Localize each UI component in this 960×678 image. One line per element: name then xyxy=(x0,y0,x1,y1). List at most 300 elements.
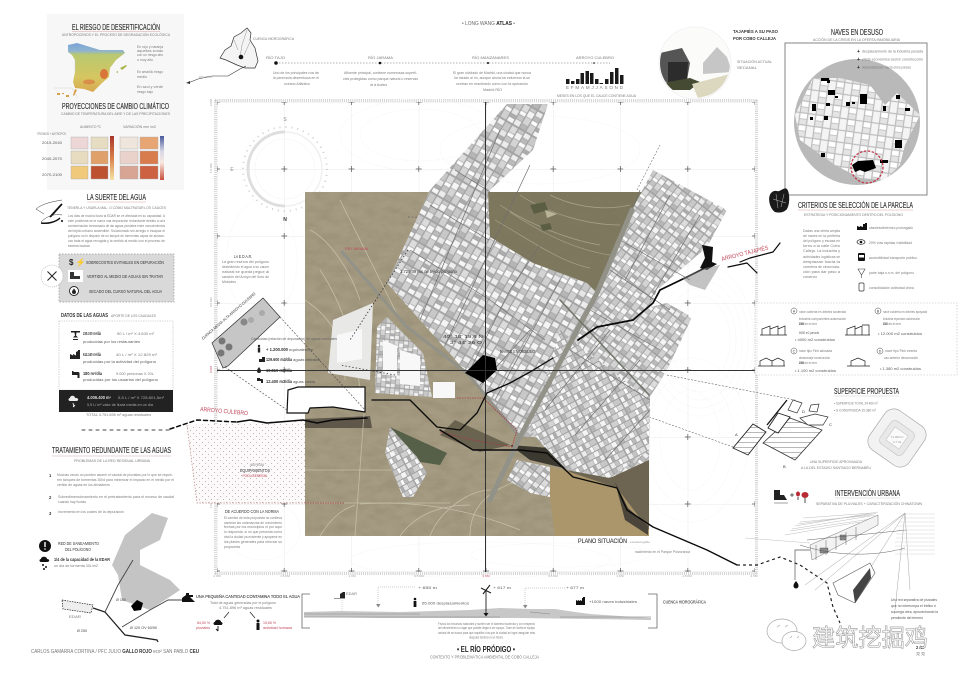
plant capacity data: 129.600 m3/día xyxy=(266,357,293,362)
heading: tratamiento redundante xyxy=(52,446,171,463)
map legend text: o muy alto xyxy=(137,58,153,62)
criteria icons and labels: obsoleto/deterioro prolongado xyxy=(869,226,913,230)
bottom terrain section xyxy=(302,585,706,660)
plant capacity data: aguas entrada xyxy=(293,358,320,362)
icon: cross in dashed circle xyxy=(41,265,63,287)
rio tajo xyxy=(266,56,319,86)
rio manzanares: centran en reactivarlo como con la operación xyxy=(456,82,528,86)
rio tajo: Uno de los principales ríos de xyxy=(273,71,319,75)
text: de acuerdo con la norma: lo respuesta, si no que presenta como xyxy=(224,530,282,534)
criteria icons and labels xyxy=(857,223,917,291)
callout: contamination shares: Total de aguas generadas por el polígono xyxy=(210,601,276,605)
rio tajo: RÍO TAJO xyxy=(266,56,285,60)
plant capacity data: Capacidad (relación de depuración) de aguas residuales xyxy=(251,337,337,341)
compass rose: S xyxy=(283,117,287,123)
aerial photo with city fabric xyxy=(287,104,795,536)
icon: river bends xyxy=(36,200,63,223)
heading: datos de las aguas xyxy=(61,313,156,319)
caption: tajapies: TAJAPIÉS A SU PASO xyxy=(733,29,779,34)
footer credit: CARLOS GAMARRA CORTINA / PFC JULIO GALLO ROJO eco² SAN PABLO CEU xyxy=(31,649,199,655)
heading: la suerte del agua: TENERLA Y USARLA MAL. O CÓMO MALTRATAR LOS CAUCES xyxy=(67,205,166,210)
type C: nave tipo Fink adosada xyxy=(799,349,832,353)
arroyo culebro: ARROYO CULEBRO xyxy=(576,56,614,60)
numbered list: vertido de aguas de los aliviaderos xyxy=(57,483,110,487)
mini map: sewer network: Ø 250 xyxy=(77,629,87,633)
text: criteria paragraph: Calleja. La industria y xyxy=(803,249,840,253)
type A: 6900 m2 parcela xyxy=(799,330,820,335)
text: criteria paragraph: Dadas una oferta amplia xyxy=(803,229,840,233)
callout: contamination shares: 84,50 % xyxy=(197,620,210,625)
climate map grids xyxy=(71,137,158,179)
plant capacity data: 12.400 m3/día xyxy=(266,379,293,384)
main highways xyxy=(342,210,649,500)
type A xyxy=(760,308,846,342)
compass rose: E xyxy=(230,167,234,173)
type B: B xyxy=(877,310,880,314)
page number: 見 見 xyxy=(916,651,925,657)
text: water fate paragraph: tratamiento inaudizado xyxy=(68,244,90,248)
panel: desertification and climate: 2015-2040 xyxy=(42,140,63,145)
text: water fate paragraph: del tejido urbano sostenible. Solucionado sin arreglo e incapaz el xyxy=(68,229,165,233)
row: users: producidas por los usuarios del polígono xyxy=(83,377,159,382)
text: water fate paragraph: nar toda el agua recogida y la vertido al medio con el proceso de xyxy=(68,239,165,243)
page number: 2 /27 xyxy=(916,645,926,650)
label: plano situacion: PLANO SITUACIÓN xyxy=(578,538,627,545)
type B: nave cubierta en dientes apoyada xyxy=(883,310,927,314)
type C xyxy=(758,348,836,373)
row: industrial activity: producidas por la actividad del polígono xyxy=(83,359,157,364)
type A: industria componentes automoción xyxy=(799,317,846,321)
text: de acuerdo con la norma xyxy=(224,509,282,549)
type B: 2010 año de cierre xyxy=(883,322,901,326)
icon: water drop xyxy=(794,581,798,588)
type C: 2008 año de cierre xyxy=(799,361,817,365)
icon: restaurant xyxy=(71,331,80,340)
row: restaurants xyxy=(83,331,155,344)
elevation 677: + 677 m xyxy=(566,585,585,590)
text: section note: natural de se busca para que aquellos ríos que la ciudad se logre asegurar más xyxy=(438,631,535,635)
scale labels: 0 KM xyxy=(482,574,490,578)
numbered list: cuando hay lluvias xyxy=(58,500,86,504)
type B xyxy=(845,308,927,336)
river bank xyxy=(305,416,372,428)
row: industrial activity: 613.160 m³/día xyxy=(83,352,101,357)
text: sewer network: RED DE SANEAMIENTO xyxy=(58,541,100,546)
heading: tratamiento redundante: TRATAMIENTO REDUNDANTE DE LAS AGUAS xyxy=(52,446,171,455)
panel: warehouse types xyxy=(755,303,957,375)
numbered list: Incremento en los costes de la depuración xyxy=(58,510,124,514)
EDAR marker: EDAR xyxy=(346,592,357,596)
west roads xyxy=(305,200,520,536)
labels on aerial photo xyxy=(345,246,536,354)
numbered list: ren tanques de tormentas 30l/d para minimizar el impacto en el medio por el xyxy=(57,478,174,482)
panel: overflow consequences: VERTIDO AL MEDIO DE AGUAS SIN TRATAR xyxy=(87,274,163,279)
chart: months with water xyxy=(557,68,637,98)
scale labels: 0.5 KM xyxy=(414,574,424,578)
text: criteria paragraph: actividades logísticas se xyxy=(803,255,840,259)
icon: Madrid basin map: RÍO TAJO xyxy=(199,75,213,79)
displacements: 65.000 desplazamientos xyxy=(422,600,469,606)
criteria icons and labels: parte baja s.n.m. del polígono xyxy=(869,271,914,275)
type A: nave cubierta en dientes sostenida xyxy=(799,310,846,314)
text: separative network xyxy=(891,598,938,620)
text: capacity: 1/4 de la capacidad de la EDAR xyxy=(54,557,110,562)
panel: naves en desuso: NAVES EN DESUSO xyxy=(831,28,883,37)
text: de acuerdo con la norma: El cambio de esta propuesta no conlleva xyxy=(224,516,282,520)
heading: la suerte del agua xyxy=(67,193,166,210)
scale labels: 1.5 KM xyxy=(209,163,213,173)
panel: overflow consequences xyxy=(41,254,174,302)
type D: • 1.380 m2 construidos xyxy=(880,366,921,371)
text: equipamientos: EQUIPAMIENTOS xyxy=(240,468,270,473)
river: dashed source xyxy=(737,557,840,623)
text: section note: después tendrá en un futuro xyxy=(469,636,503,640)
caption: stadium xyxy=(801,460,871,470)
bullet notes: deslocalización hacia otros países xyxy=(862,66,911,70)
type A: A xyxy=(793,310,796,314)
text: section note: del ofrecimiento un lugar que posible llegar a ser equipo. Traer de vuelta el equipo xyxy=(438,626,535,630)
heading: climate projections: PROYECCIONES DE CAMBIO CLIMÁTICO xyxy=(62,102,169,111)
panel: desertification and climate xyxy=(37,14,184,190)
parcels plan xyxy=(733,400,832,469)
dotted equipment zone xyxy=(187,420,305,503)
text: section note: Frutos los recursos naturales y suelen ser el sistema haciendo y con respecto xyxy=(438,622,535,626)
map legend text: aquellas zonas xyxy=(137,49,163,53)
factories note xyxy=(576,597,637,605)
label: arroyo culebro: ARROYO CULEBRO xyxy=(200,407,248,417)
wastewater plant xyxy=(201,292,365,410)
icon: Madrid basin map xyxy=(186,28,295,84)
row: restaurants: 50 L / m² X 4.600 m² xyxy=(117,332,155,336)
map legend text: con un riesgo alto xyxy=(137,53,163,57)
windmill and elevation 617 xyxy=(481,585,512,616)
caption: tajapies: SITUACIÓN ACTUAL xyxy=(737,59,772,64)
rio tajo: océano Atlántico xyxy=(284,82,310,86)
type B: • 12.000 m2 construidos xyxy=(878,331,922,336)
type C: • 1.100 m2 construidos xyxy=(795,368,836,373)
panel: proposed surface: • S CONSTRUIDA 15.380 m² xyxy=(834,408,877,412)
panel: desertification and climate: 2040-2070 xyxy=(42,156,63,161)
heading: tratamiento redundante: PROBLEMAS DE LA RED RESIDUAL URBANA xyxy=(74,459,150,463)
map of Spain xyxy=(54,43,127,98)
labels on aerial photo: 40° 18' 19,6 N xyxy=(443,334,483,339)
displacements xyxy=(414,598,469,607)
white industrial blocks xyxy=(337,329,455,398)
scale labels: 2 KM xyxy=(213,574,221,578)
map legend text: En azul y verde xyxy=(137,85,163,89)
label: arroyo tajapies: ARROYO TAJAPIÉS xyxy=(721,245,769,263)
windmill and elevation 617: + 617 m xyxy=(493,585,512,590)
page number xyxy=(916,645,926,657)
callout: rainfall: 5,5 L/ m² valor de lluvia media en un día xyxy=(87,403,153,407)
scale labels: 0.5 KM xyxy=(209,297,213,307)
text: criteria paragraph: comercio xyxy=(803,275,817,279)
elevation 655 xyxy=(376,585,438,608)
stadium comparison xyxy=(864,405,930,471)
watermark: 建筑挖掘鸡 xyxy=(812,618,928,653)
panel: urban intervention: SEPARATIVA DE PLUVIALES + CARACTERIZACIÓN CHINATOWN xyxy=(816,501,922,506)
EDAR marker xyxy=(334,592,357,612)
blank plot outline xyxy=(287,387,365,413)
rio manzanares xyxy=(453,56,531,92)
labels on aerial photo: RÍO JARAMA xyxy=(345,246,368,251)
numbered list: 2 xyxy=(49,495,52,500)
text: la e.d.a.r.: LA E.D.A.R. xyxy=(234,254,252,259)
type D: nave tipo Fink exenta xyxy=(885,349,917,353)
criteria icons and labels: consolidación actividad china xyxy=(869,286,914,290)
title: el rio prodigo: • EL RÍO PRÓDIGO • xyxy=(457,645,515,654)
scale labels: 1.5 KM xyxy=(280,574,290,578)
icon: discharge xyxy=(68,270,83,282)
text: de acuerdo con la norma: vital la ciudad ya existente y apoyarse en xyxy=(224,535,282,539)
text: de acuerdo con la norma: cambiar las ordenanzas de crecimiento xyxy=(224,521,282,525)
factories note: +1000 naves industriales xyxy=(589,599,637,604)
hill xyxy=(488,192,645,293)
title: atlas: • LONG WANG ATLAS • xyxy=(462,21,515,27)
numbered list: 3 xyxy=(49,511,52,516)
street perspective sketch xyxy=(745,512,935,610)
numbered list: Sobredimensionamiento en el pretratamiento para el exceso de caudal xyxy=(58,495,174,499)
bullet notes xyxy=(857,49,923,71)
panel: naves en desuso xyxy=(302,28,957,660)
icon: cost: $ ⚡ xyxy=(69,257,86,267)
row: users: 180 m³/día xyxy=(83,371,103,376)
text: criteria paragraph: de naves en la periferia xyxy=(803,234,840,238)
total: TOTAL 4.751.696 m³ aguas residuales xyxy=(86,413,151,417)
scale labels: 0.5 KM xyxy=(548,574,558,578)
row: users xyxy=(83,371,159,382)
text: separative network: Una red separativa de pluviales xyxy=(891,598,937,602)
green strip xyxy=(390,427,447,465)
type B: industria repuestos automoción xyxy=(883,317,920,321)
panel: overflow consequences: SOBRECOSTES EVITABLES EN DEPURACIÓN xyxy=(86,260,164,265)
type D: D xyxy=(879,350,882,354)
numbered list: Muchas veces no pueden asumir el caudal de pluviales por lo que se requie- xyxy=(57,473,174,477)
panel: proposed surface: SUPERFICIE PROPUESTA xyxy=(834,387,899,396)
parcels plan: D xyxy=(802,409,805,414)
text: de acuerdo con la norma: los planes generales para reforzar su xyxy=(224,540,282,544)
text: criteria paragraph: torno a la calle Cobo xyxy=(803,244,840,248)
icon: factory xyxy=(70,350,80,359)
panel: naves en desuso: ACCIÓN DE LA CRISIS EN LA OFERTA INMOBILIARIA xyxy=(813,37,900,42)
panel: parcel criteria xyxy=(798,201,917,291)
bullet notes: desplazamiento de la industria pesada xyxy=(862,50,923,54)
callout: contamination shares: 15,65 % xyxy=(263,620,276,625)
label: plano situacion xyxy=(578,538,690,554)
plant capacity data: equivalentes xyxy=(289,348,313,352)
text: water fate paragraph: contaminación innecesaria de las aguas pluviales entre conocimientos xyxy=(68,224,165,228)
type A: 2008 año de cierre xyxy=(799,322,817,326)
text: la e.d.a.r.: Móstoles xyxy=(222,280,236,284)
scale labels: 0.5 KM xyxy=(209,431,213,441)
rio jarama: de la biosfera xyxy=(370,83,387,87)
text: equipamientos xyxy=(240,463,270,478)
scale labels: 0 KM xyxy=(209,365,213,373)
row: users: 9.000 personas X 20L xyxy=(116,372,154,376)
panel: desertification and climate: VARIACIÓN mm /m2 xyxy=(123,124,156,129)
label: plano situacion: nacimiento en el Parque Polvoranca xyxy=(635,550,690,554)
scale labels xyxy=(209,98,758,578)
rio manzanares: El gran olvidado de Madrid, una ciudad que nunca xyxy=(453,71,531,75)
icon: storm cloud xyxy=(40,557,49,570)
main axes xyxy=(217,102,755,572)
text: la e.d.a.r.: La gran reserva del polígono xyxy=(222,260,269,264)
heading: datos de las aguas: DATOS DE LAS AGUAS xyxy=(61,313,109,319)
main streets in city fabric xyxy=(410,130,700,460)
text: water fate paragraph: Los días de mucha lluvia la EDAR se ve afectada en su capacidad. A xyxy=(68,214,166,218)
text: water fate paragraph xyxy=(68,214,166,248)
callout: contamination shares: actividad humana xyxy=(263,625,293,630)
caption: stadium: UNA SUPERFICIE APROXIMADA xyxy=(810,460,863,464)
colour scales xyxy=(110,136,164,180)
panel: desertification and climate: TRIENIOS + ANTROPOS xyxy=(37,132,66,136)
river: arroyo culebro and tajapies xyxy=(82,243,780,565)
heading: desertification: EL RIESGO DE DESERTIFICACIÓN xyxy=(72,23,160,32)
callout: rainfall: 4.006.400 m³ xyxy=(87,395,112,400)
text: criteria paragraph: ción para dar paso a xyxy=(803,270,840,274)
icon: warning xyxy=(39,540,51,552)
terrain profile xyxy=(304,608,651,620)
title: el rio prodigo xyxy=(430,645,539,660)
rio manzanares: RÍO MANZANARES xyxy=(472,56,509,60)
labels on aerial photo: 3° 44' 26 O xyxy=(450,340,483,345)
text: la e.d.a.r.: natural se queda pegue al xyxy=(222,270,269,274)
text: criteria paragraph xyxy=(803,229,841,279)
text: capacity: un día de tormenta 30L/m2 xyxy=(54,564,98,568)
bracket right xyxy=(648,594,657,628)
bullet notes: crisis económica sector construcción xyxy=(862,58,923,62)
callout: contamination shares: pluviales xyxy=(196,625,210,630)
panel: parcel criteria: ESTRATEGIA Y POSICIONAMIENTO DENTRO DEL POLÍGONO xyxy=(804,213,903,217)
callout: rainfall xyxy=(59,390,173,412)
parcels plan: C xyxy=(829,422,832,427)
text: de acuerdo con la norma: DE ACUERDO CON LA NORMA xyxy=(225,509,279,514)
label: cuenca: CUENCA MEDIA-ALTA ARROYO CULEBRO xyxy=(201,292,257,341)
map legend text: En rojo y naranja xyxy=(137,45,163,49)
panel: desertification and climate: 2070-2100 xyxy=(42,172,63,177)
type C: C xyxy=(793,350,796,354)
bullet notes: + xyxy=(857,65,860,71)
scale labels: 1.5 KM xyxy=(682,574,692,578)
callout: contamination shares xyxy=(196,594,300,631)
mini map: sewer network: Ø 120 OV 60/90 xyxy=(130,626,157,630)
text: separative network: pendiente del terreno xyxy=(891,616,923,620)
type A: • 4000 m2 construidos xyxy=(795,337,835,342)
dashed sight lines xyxy=(408,145,795,447)
black building xyxy=(465,355,497,383)
scale labels: 1 KM xyxy=(616,574,624,578)
scale labels: 1 KM xyxy=(209,500,213,508)
map legend text: medio xyxy=(137,75,147,79)
caption: tajapies xyxy=(733,29,779,70)
text: sewer network: DEL POLÍGONO xyxy=(65,547,92,552)
plant capacity data xyxy=(251,337,337,384)
scale labels: 1 KM xyxy=(348,574,356,578)
type C: almacenaje construcción xyxy=(799,356,830,360)
heading: datos de las aguas: APORTE DE LOS CAUDALES xyxy=(111,314,156,318)
callout: contamination shares: 4.751.896 m³ aguas residuales xyxy=(219,606,272,610)
labels on aerial photo: 1.729,09 ms de tejido polígono xyxy=(400,269,458,274)
row: industrial activity xyxy=(83,352,158,364)
icon: pepper xyxy=(769,188,789,213)
rio manzanares: Madrid RÍO xyxy=(483,88,502,92)
icon: chat bubbles xyxy=(767,619,806,650)
mini map: sewer network: Ø 150 xyxy=(116,598,126,602)
rio jarama: RÍO JARAMA xyxy=(368,56,393,60)
chart: months with water: EFMAMJJASOND xyxy=(566,85,624,90)
plant capacity data: aguas salida xyxy=(293,380,315,384)
row: restaurants: 230.100 m³/día xyxy=(83,331,101,336)
text: la e.d.a.r.: sanción del Arroyo del Soto de xyxy=(222,275,269,279)
bracket left xyxy=(302,594,310,628)
row: restaurants: producidas por los restaurantes xyxy=(83,339,140,344)
mini map: sewer network: EDAR xyxy=(69,615,81,619)
stadium comparison: 3,7 ha xyxy=(893,440,902,444)
dotted trajectory xyxy=(340,250,408,375)
panel: proposed surface xyxy=(733,387,930,471)
numbered list: 1 xyxy=(49,473,52,478)
criteria icons and labels: 20% vías rápidas /visibilidad xyxy=(869,241,912,245)
title: el rio prodigo: CONTEXTO Y PROBLEMÁTICA AMBIENTAL DE COBO CALLEJA xyxy=(430,654,539,660)
text: la e.d.a.r.: desviviendo el agua a su cauce xyxy=(222,265,269,269)
text: sewer network xyxy=(58,541,100,552)
text: section note xyxy=(438,622,535,640)
text: capacity xyxy=(54,557,110,568)
caption: tajapies: SECANAL xyxy=(737,66,757,70)
plant capacity data: 10.819 m3/día xyxy=(266,368,293,373)
scale labels: 2 KM xyxy=(209,98,213,106)
mini map: sewer network xyxy=(62,513,195,642)
stadium comparison: 71.000m² xyxy=(891,435,903,439)
heading: la suerte del agua: LA SUERTE DEL AGUA xyxy=(87,193,146,202)
rio jarama: cies protegidas como parque natural o reservas xyxy=(343,77,418,81)
red protected boundary xyxy=(305,398,517,503)
city fabric blocks xyxy=(328,104,727,497)
map legend text xyxy=(137,45,163,94)
river timeline xyxy=(266,56,614,92)
rio tajo: la península desemboca en el xyxy=(273,76,319,80)
circular plan xyxy=(794,49,923,185)
panel: urban intervention: INTERVENCIÓN URBANA xyxy=(835,489,900,498)
bullet notes: + xyxy=(857,57,860,63)
label: plano situacion: escala legible xyxy=(630,540,650,544)
text: separative network: suponga obra, aprovechando la xyxy=(891,610,938,614)
panel: desertification and climate: CAMBIO DE TEMPERATURA DEL AIRE Y DE LAS PRECIPITACIONES xyxy=(61,112,170,116)
text: la e.d.a.r. xyxy=(222,254,269,284)
text: criteria paragraph: desplazan hacia la xyxy=(803,260,840,264)
criteria icons and labels: accesibilidad transporte público xyxy=(869,256,917,260)
text: separative network: que no interrumpa el tráfico e xyxy=(891,604,936,608)
text: de acuerdo con la norma: fechas por los municipios ni por aquí xyxy=(224,525,282,529)
photo: tajapies xyxy=(659,27,779,99)
label: basin: CUENCA HIDROGRÁFICA xyxy=(663,600,706,604)
compass rose xyxy=(230,117,327,223)
elevation 655: + 655 m xyxy=(418,585,438,590)
row: industrial activity: 40 L / m² X 12.829 m² xyxy=(116,353,158,357)
panel: urban intervention xyxy=(745,489,938,620)
panel: proposed surface: • SUPERFICIE TOTAL 24.400 m² xyxy=(834,402,879,406)
type D: uso anterior desconocido xyxy=(884,356,918,360)
text: water fate paragraph: polígono no le dispone de un tanque de tormentas capaz de almace- xyxy=(68,234,166,238)
text: water fate paragraph: este problema se le suma una depuración redundante debido a una xyxy=(68,219,165,223)
text: equipamientos: UNA PIEDRA xyxy=(250,463,264,467)
icon: factory plus lantern xyxy=(774,490,808,503)
callout: contamination shares: UNA PEQUEÑA CANTIDAD CONTAMINA TODO EL AGUA xyxy=(196,594,300,599)
south-east field xyxy=(550,467,649,536)
plant capacity data: + 1.200.000 xyxy=(266,347,289,352)
rio jarama xyxy=(343,56,418,87)
parcels plan: B xyxy=(783,464,786,469)
